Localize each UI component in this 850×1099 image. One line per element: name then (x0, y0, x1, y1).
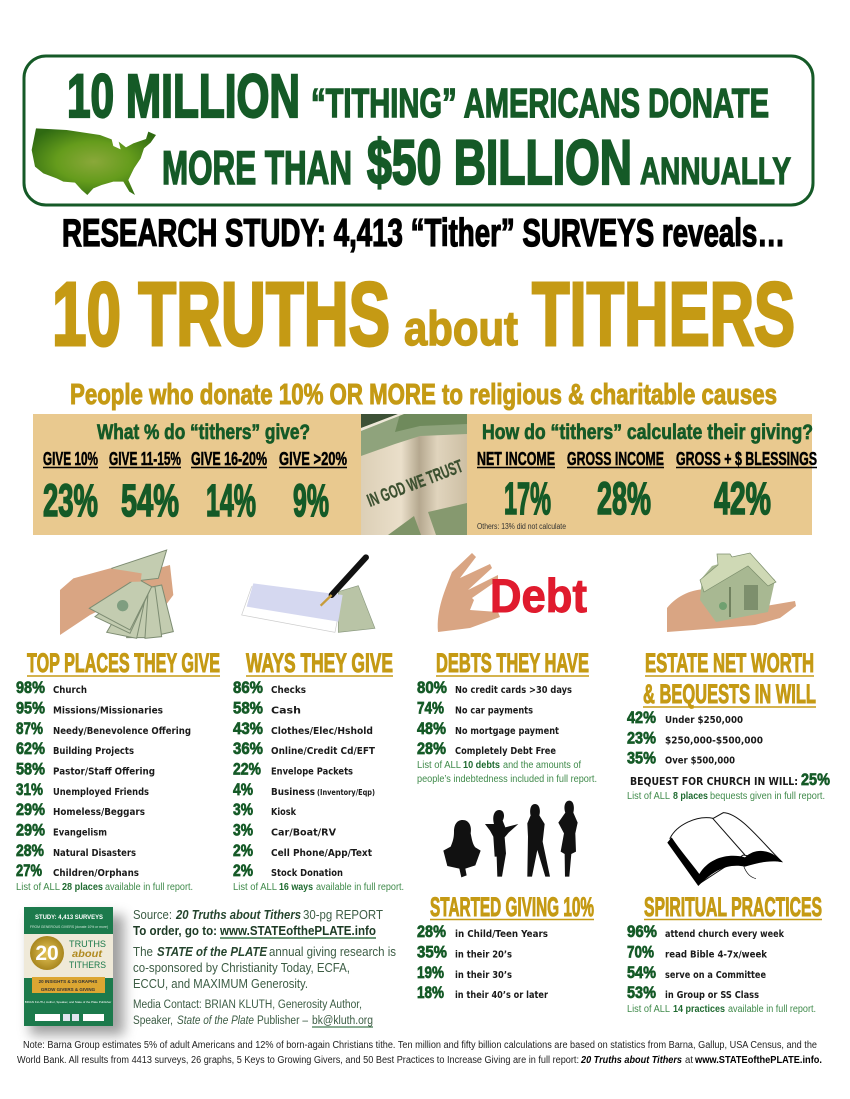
media contact: Publisher – (257, 1015, 309, 1027)
row: Business (271, 787, 315, 798)
row: Envelope Packets (271, 766, 353, 778)
row: 23% (627, 730, 656, 748)
headline line 2 (162, 128, 791, 198)
footnote: people’s indebtedness included in full report. (417, 774, 597, 785)
footnote: List of ALL (417, 760, 461, 771)
panel: how tithers calculate: NET INCOME (477, 449, 555, 469)
panel: what percent tithers give: GIVE >20% (279, 449, 347, 469)
footer note: at (685, 1055, 693, 1066)
report cover: STUDY: 4,413 SURVEYS (35, 914, 104, 921)
row: in their 20’s (455, 950, 512, 960)
row: in their 40’s or later (455, 990, 548, 1001)
row (417, 720, 559, 738)
report cover: TRUTHS (69, 939, 106, 949)
panel: how tithers calculate (477, 421, 817, 531)
row (627, 709, 743, 727)
panel: ways they give (233, 648, 404, 893)
row: in their 30’s (455, 970, 512, 981)
footer note (17, 1040, 822, 1066)
row (233, 679, 306, 697)
row: 35% (417, 944, 447, 962)
row: No mortgage payment (455, 726, 559, 737)
headline line 1: 10 MILLION (67, 62, 300, 130)
source text block (133, 908, 396, 1027)
row (627, 730, 763, 748)
row: Car/Boat/RV (271, 828, 336, 838)
headline line 2: $50 BILLION (367, 128, 632, 198)
heading: DEBTS THEY HAVE (436, 648, 589, 678)
main title: 10 TRUTHS (52, 265, 390, 365)
row: in Child/Teen Years (455, 929, 548, 940)
row: Clothes/Elec/Hshold (271, 726, 373, 737)
report cover: BRIAN KLUTH, Author, Speaker, and State of the Plate Publisher (25, 1000, 111, 1004)
row: No car payments (455, 706, 533, 716)
row (417, 679, 572, 697)
row: 36% (233, 740, 263, 758)
row (627, 944, 767, 962)
row (233, 700, 301, 718)
heading: STARTED GIVING 10% (430, 892, 594, 922)
row: Church (53, 685, 87, 696)
row (16, 842, 136, 860)
row: 29% (16, 801, 45, 819)
row (417, 984, 548, 1002)
row (417, 923, 548, 941)
sponsors paragraph: co-sponsored by Christianity Today, ECFA, (133, 961, 350, 975)
row: 54% (627, 964, 656, 982)
row: 29% (16, 822, 45, 840)
row: 3% (233, 801, 253, 819)
row (233, 760, 353, 778)
row: 96% (627, 923, 657, 941)
row: Over $500,000 (665, 756, 735, 766)
media contact: State of the Plate (177, 1015, 254, 1027)
icon: debt hand: Debt (490, 569, 587, 622)
footnote: available in full report. (105, 882, 193, 893)
panel: top places they give (16, 648, 220, 893)
sponsors paragraph (133, 945, 396, 991)
row: Unemployed Friends (53, 787, 149, 798)
footnote: 8 places (673, 791, 708, 802)
row: 70% (627, 944, 654, 962)
panel: what percent tithers give: 14% (206, 475, 256, 526)
row: No credit cards >30 days (455, 685, 572, 696)
main title (52, 265, 795, 365)
row: 27% (16, 862, 42, 880)
sponsors paragraph: annual giving research is (269, 945, 396, 959)
row: 74% (417, 700, 444, 718)
row: in Group or SS Class (665, 990, 759, 1001)
row (627, 984, 759, 1002)
report cover: GROW GIVERS & GIVING (41, 987, 96, 992)
headline line 1 (67, 62, 769, 130)
row (233, 822, 336, 840)
row (233, 781, 375, 799)
footnote (627, 791, 825, 802)
icon: women silhouettes (443, 801, 578, 877)
row: 28% (417, 923, 446, 941)
report cover: 20 INSIGHTS & 26 GRAPHS (39, 979, 97, 984)
footnote: 14 practices (673, 1004, 725, 1015)
row: Under $250,000 (665, 715, 743, 726)
bequest stat: 25% (801, 771, 830, 789)
row (417, 740, 556, 758)
row: Cell Phone/App/Text (271, 848, 372, 859)
order link: To order, go to: (133, 924, 217, 938)
report cover: TITHERS (69, 960, 106, 970)
row: 53% (627, 984, 656, 1002)
row (16, 700, 163, 718)
footnote (233, 882, 404, 893)
photo: dollar bill in god we trust: IN GOD WE TRUST (364, 456, 466, 511)
row (16, 679, 87, 697)
order link (133, 924, 376, 938)
footer note: 20 Truths about Tithers (580, 1055, 682, 1066)
row: Evangelism (53, 828, 107, 838)
footnote: List of ALL (233, 882, 277, 893)
heading (643, 648, 816, 709)
row: (Inventory/Eqp) (317, 788, 375, 797)
footnote: and the amounts of (503, 760, 581, 771)
media contact: Media Contact: BRIAN KLUTH, Generosity Author, (133, 999, 362, 1011)
headline line 2: ANNUALLY (640, 151, 791, 193)
headline line 2: MORE THAN (162, 141, 352, 194)
footnote: 16 ways (279, 882, 313, 893)
row (16, 720, 191, 738)
icon: USA map (32, 128, 156, 195)
row: 58% (233, 700, 263, 718)
footer note: World Bank. All results from 4413 surveys, 26 graphs, 5 Keys to Growing Givers, and 50 Best Practices to Increase Giving are in full report: (17, 1055, 579, 1066)
media contact (133, 999, 373, 1027)
panel: spiritual practices (627, 892, 822, 1015)
panel: started giving 10% (417, 892, 594, 1002)
panel: what percent tithers give: 54% (121, 475, 179, 526)
row: Checks (271, 685, 306, 696)
row (16, 822, 107, 840)
row: Online/Credit Cd/EFT (271, 746, 375, 757)
row (417, 700, 533, 718)
media contact: bk@kluth.org (312, 1015, 373, 1027)
footnote: List of ALL (16, 882, 60, 893)
row (233, 720, 373, 738)
source line: 30-pg REPORT (303, 908, 383, 922)
row (16, 862, 139, 880)
row (233, 862, 343, 880)
heading: WAYS THEY GIVE (246, 648, 393, 678)
row: 2% (233, 862, 253, 880)
photo: dollar bill in god we trust (361, 414, 467, 535)
row: Stock Donation (271, 868, 343, 879)
footnote (16, 882, 193, 893)
row: 95% (16, 700, 45, 718)
order link: www.STATEofthePLATE.info (219, 924, 376, 938)
panel: estate net worth (627, 648, 830, 802)
row: Homeless/Beggars (53, 807, 145, 818)
source line: Source: (133, 908, 172, 922)
row (233, 842, 372, 860)
row: $250,000-$500,000 (665, 736, 763, 746)
icon: debt hand (438, 553, 587, 632)
footnote: 28 places (62, 882, 103, 893)
report cover: FROM GENEROUS GIVERS (donate 10% or more) (30, 925, 108, 929)
header box (24, 56, 813, 205)
row: 4% (233, 781, 253, 799)
row: 58% (16, 760, 45, 778)
icon: check and pen (242, 557, 375, 632)
row: 48% (417, 720, 446, 738)
sponsors paragraph: ECCU, and MAXIMUM Generosity. (133, 977, 308, 991)
panel: what percent tithers give: 9% (293, 475, 329, 526)
row (233, 801, 296, 819)
row: 22% (233, 760, 261, 778)
panel: how tithers calculate: GROSS INCOME (567, 449, 664, 469)
row: Building Projects (53, 746, 134, 757)
report cover (24, 907, 124, 1035)
panel: what percent tithers give: GIVE 10% (43, 449, 98, 469)
row: 86% (233, 679, 263, 697)
footnote: available in full report. (728, 1004, 816, 1015)
footnote: bequests given in full report. (710, 791, 825, 802)
heading: TOP PLACES THEY GIVE (27, 648, 220, 678)
row (16, 760, 155, 778)
source line (133, 908, 383, 922)
row: 98% (16, 679, 45, 697)
footer note: www.STATEofthePLATE.info. (694, 1055, 822, 1066)
footnote: 10 debts (463, 760, 500, 771)
row (417, 944, 512, 962)
row (417, 964, 512, 982)
row: 2% (233, 842, 253, 860)
row: 35% (627, 750, 656, 768)
row (627, 964, 766, 982)
footnote (627, 1004, 816, 1015)
row (627, 923, 784, 941)
row: Cash (271, 706, 301, 716)
main title: about (404, 303, 518, 356)
sponsors paragraph: STATE of the PLATE (157, 945, 268, 959)
bequest stat: BEQUEST FOR CHURCH IN WILL: (630, 775, 798, 788)
row: serve on a Committee (665, 970, 766, 981)
icon: money house on hand (667, 553, 796, 632)
panel: how tithers calculate: 42% (714, 473, 771, 524)
footnote: List of ALL (627, 1004, 670, 1015)
row: attend church every week (665, 929, 784, 940)
panel: how tithers calculate: 17% (504, 473, 551, 524)
row (16, 781, 149, 799)
source line: 20 Truths about Tithers (175, 908, 301, 922)
row: 42% (627, 709, 656, 727)
panel: what percent tithers give: GIVE 11-15% (109, 449, 181, 469)
footnote (417, 760, 597, 785)
row: Kiosk (271, 807, 296, 818)
row: Natural Disasters (53, 848, 136, 859)
panel: what percent tithers give (43, 421, 347, 526)
panel: debts they have (417, 648, 597, 785)
row (233, 740, 375, 758)
panel: what percent tithers give: 23% (43, 475, 98, 526)
row: 62% (16, 740, 45, 758)
row: 80% (417, 679, 447, 697)
row: 43% (233, 720, 263, 738)
row: Pastor/Staff Offering (53, 766, 155, 778)
footnote: List of ALL (627, 791, 670, 802)
row: Completely Debt Free (455, 746, 556, 757)
row (627, 750, 735, 768)
row: 31% (16, 781, 43, 799)
panel: how tithers calculate: 28% (597, 473, 651, 524)
row: 19% (417, 964, 444, 982)
row: 18% (417, 984, 444, 1002)
row: Needy/Benevolence Offering (53, 726, 191, 737)
row (16, 740, 134, 758)
icon: hand holding money (60, 550, 173, 638)
row (16, 801, 145, 819)
panel: how tithers calculate: Others: 13% did not calculate (477, 522, 566, 531)
row: Missions/Missionaries (53, 706, 163, 716)
report cover: 20 (35, 942, 59, 965)
row: Children/Orphans (53, 868, 139, 879)
row: 28% (417, 740, 446, 758)
row: 28% (16, 842, 44, 860)
panel: what percent tithers give: GIVE 16-20% (191, 449, 267, 469)
sponsors paragraph: The (133, 945, 153, 959)
row: read Bible 4-7x/week (665, 950, 767, 960)
panel: tithers stats (33, 414, 817, 535)
report cover: about (72, 949, 103, 960)
icon: open book (667, 813, 783, 886)
row: 87% (16, 720, 43, 738)
panel: what percent tithers give: What % do “tithers” give? (97, 421, 310, 444)
media contact: Speaker, (133, 1015, 173, 1027)
row: 3% (233, 822, 253, 840)
footnote: available in full report. (316, 882, 404, 893)
